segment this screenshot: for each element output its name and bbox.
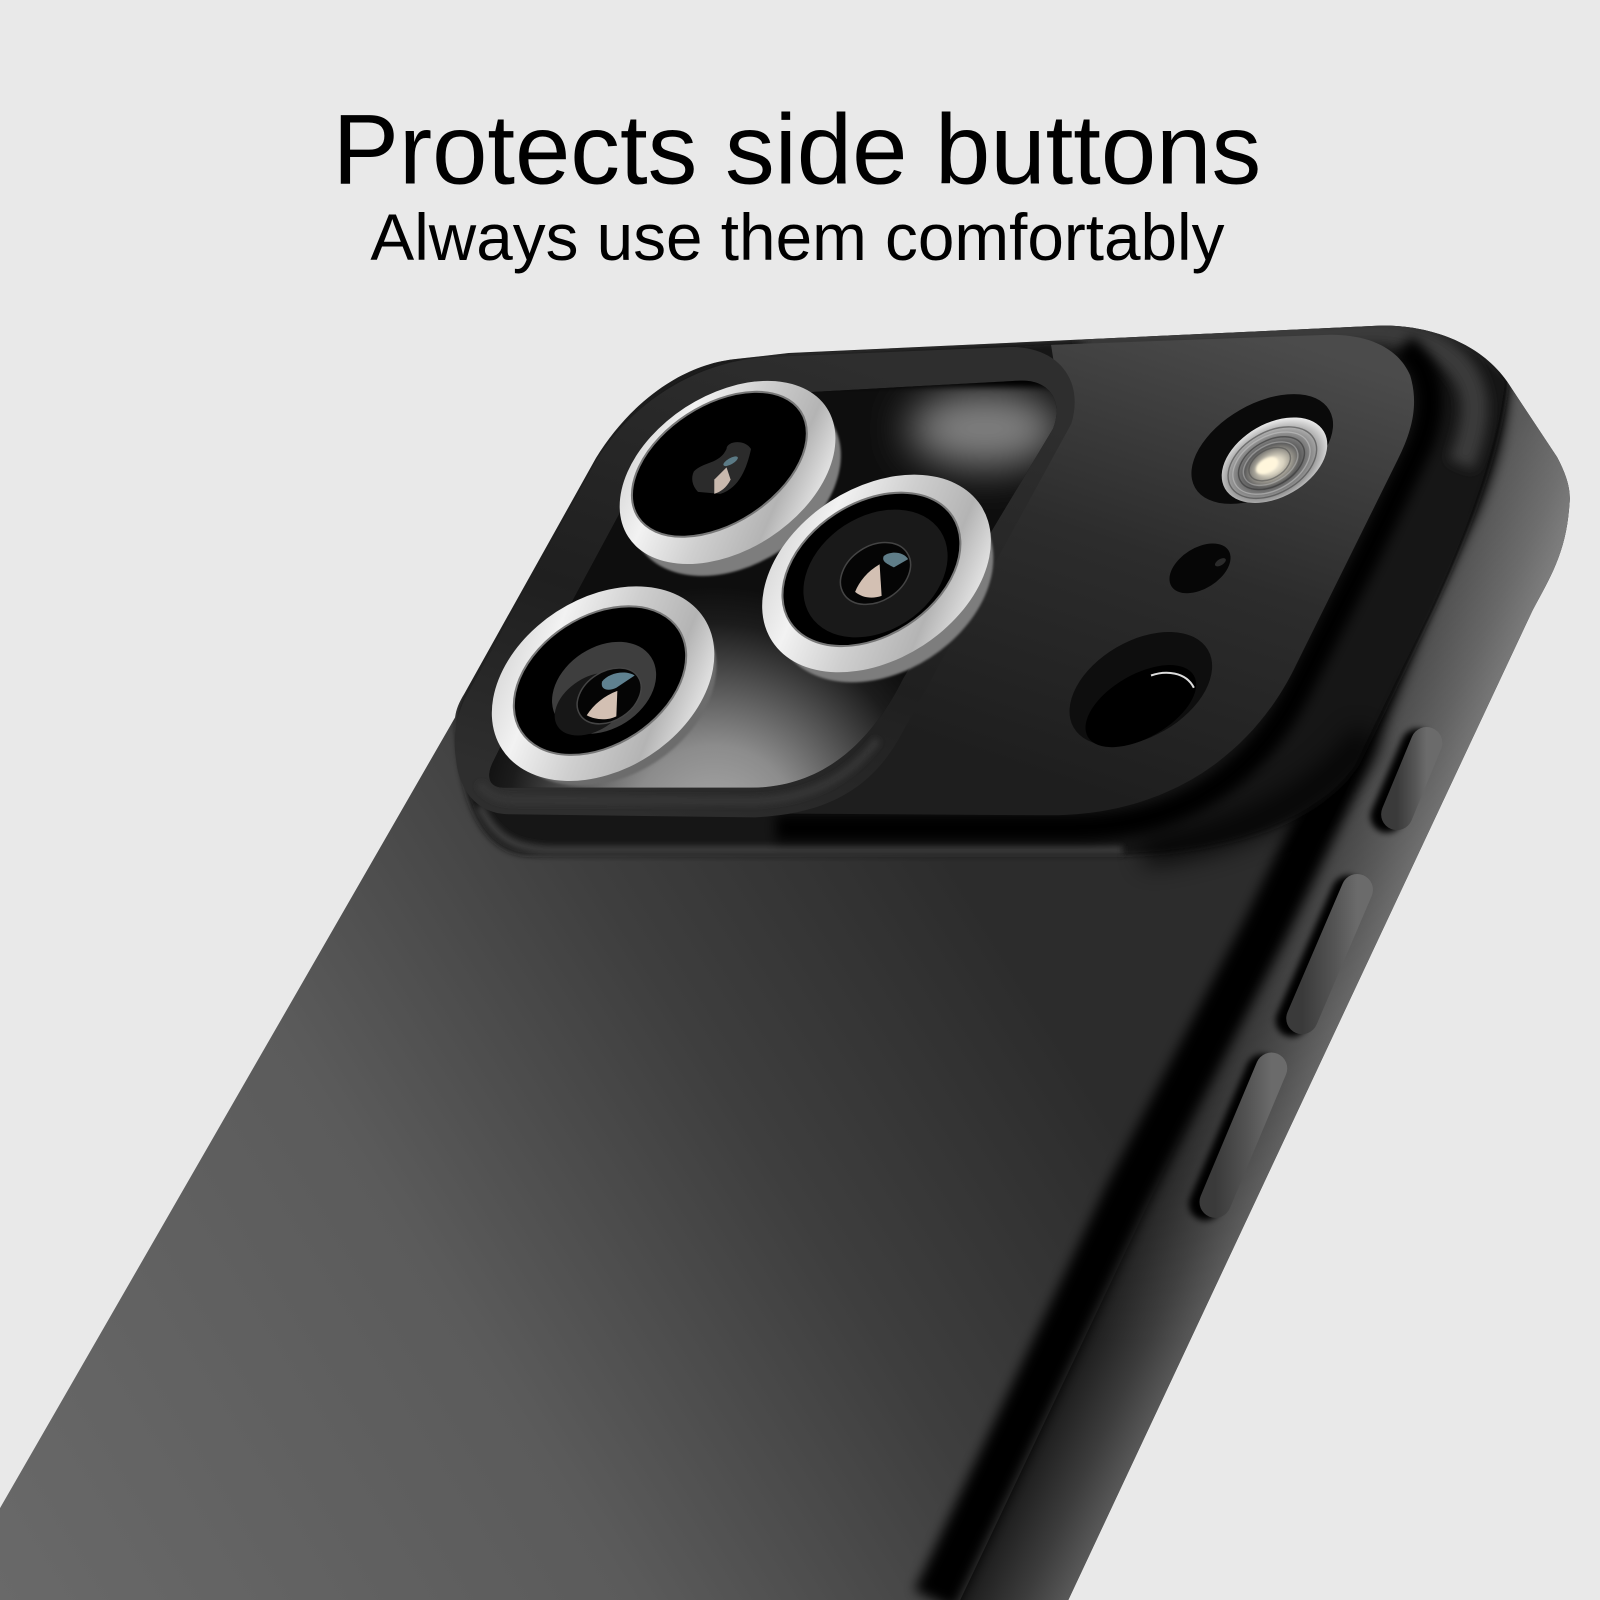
lens: right — [762, 474, 995, 684]
side button: top — [1387, 743, 1427, 816]
flash cutout — [1192, 394, 1333, 504]
lens ring — [762, 474, 991, 672]
plateau — [755, 335, 1414, 815]
lens body — [536, 643, 718, 786]
flash recess — [1192, 394, 1333, 504]
flash lens — [1222, 418, 1328, 503]
lens: bottom left — [492, 586, 718, 786]
side button: middle — [1292, 890, 1357, 1020]
camera bump base — [456, 326, 1507, 855]
camera window — [489, 380, 1056, 788]
lens ring — [492, 586, 714, 781]
pupil — [576, 668, 640, 725]
top rim ridge — [1082, 332, 1474, 464]
lens body — [790, 534, 995, 684]
lens glass — [512, 605, 688, 756]
subtitle: Always use them comfortably — [370, 201, 1225, 275]
pupil — [840, 542, 912, 606]
lidar sensor — [1070, 632, 1212, 748]
title: Protects side buttons — [333, 94, 1261, 205]
soft shadow under bump corner — [1143, 735, 1367, 852]
plateau shadow band — [776, 347, 1429, 828]
lens element — [692, 442, 751, 494]
camera frame — [455, 347, 1075, 817]
side button: bottom — [1205, 1068, 1271, 1204]
frame lower highlight — [480, 740, 878, 801]
lens glass — [781, 492, 962, 648]
lens glass — [630, 390, 808, 538]
lens: top — [620, 380, 842, 578]
microphone hole — [1170, 544, 1230, 594]
side face of case — [960, 382, 1570, 1600]
bump lower rim — [480, 806, 1122, 850]
black crease along the edge — [935, 378, 1488, 1600]
lens body — [640, 423, 842, 578]
lens ring — [620, 380, 836, 564]
